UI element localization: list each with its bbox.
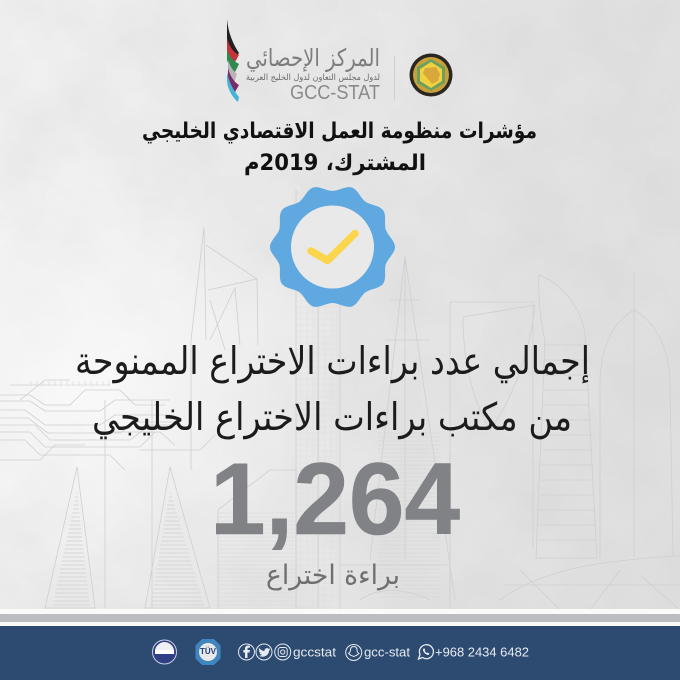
building: domed tower bbox=[600, 272, 673, 557]
icon: certification seal bbox=[152, 640, 176, 664]
divider bbox=[394, 56, 395, 100]
title line 1: مؤشرات منظومة العمل الاقتصادي الخليجي bbox=[142, 119, 537, 144]
title line 2: المشترك، 2019م bbox=[244, 151, 426, 176]
logo Arabic subtitle: لدول مجلس التعاون لدول الخليج العربية bbox=[246, 73, 380, 83]
logo ribbon bbox=[227, 19, 239, 102]
icon: TUV seal bbox=[196, 639, 220, 665]
big number: 1,264 bbox=[210, 442, 460, 556]
unit label: براءة اختراع bbox=[266, 560, 400, 591]
emblem: GCC bbox=[410, 54, 452, 96]
divider strips bbox=[0, 609, 680, 626]
building: twin sail left bbox=[45, 400, 210, 608]
building: central grid column bbox=[296, 190, 340, 610]
title bbox=[142, 119, 537, 176]
skyline and circuit illustration bbox=[0, 190, 680, 610]
icon: snapchat bbox=[346, 644, 362, 660]
icon: blue badge with check bbox=[270, 182, 395, 312]
icon: twitter bbox=[256, 644, 272, 660]
icon: whatsapp bbox=[418, 645, 433, 659]
building: stadium and ship bbox=[340, 556, 680, 610]
handle: gcc-stat: gcc-stat bbox=[364, 644, 410, 660]
building: triangular tower bbox=[370, 257, 455, 600]
building: shield tower bbox=[450, 302, 535, 600]
icon: check mark bbox=[311, 234, 355, 260]
circuit traces bbox=[0, 380, 215, 470]
heading line 2: من مكتب براءات الاختراع الخليجي bbox=[92, 395, 572, 440]
icon: facebook bbox=[238, 644, 254, 660]
icon: TUV seal: TÜV bbox=[200, 647, 217, 656]
heading line 1: إجمالي عدد براءات الاختراع الممنوحة bbox=[75, 339, 590, 384]
logo Arabic name: المركز الإحصائي bbox=[246, 44, 380, 72]
icon: instagram bbox=[275, 644, 291, 660]
building: sail towers rear bbox=[191, 227, 258, 470]
logo: GCC-STAT bbox=[227, 19, 380, 104]
main heading bbox=[75, 339, 590, 440]
handle: gccstat: gccstat bbox=[293, 644, 336, 660]
phone number: +968 2434 6482 bbox=[435, 644, 529, 660]
circuit dots bbox=[30, 381, 110, 386]
building: right hatched block bbox=[218, 470, 296, 610]
footer bar bbox=[0, 626, 680, 680]
building: sail tower bbox=[536, 275, 597, 558]
logo Latin name: GCC-STAT bbox=[290, 82, 380, 104]
